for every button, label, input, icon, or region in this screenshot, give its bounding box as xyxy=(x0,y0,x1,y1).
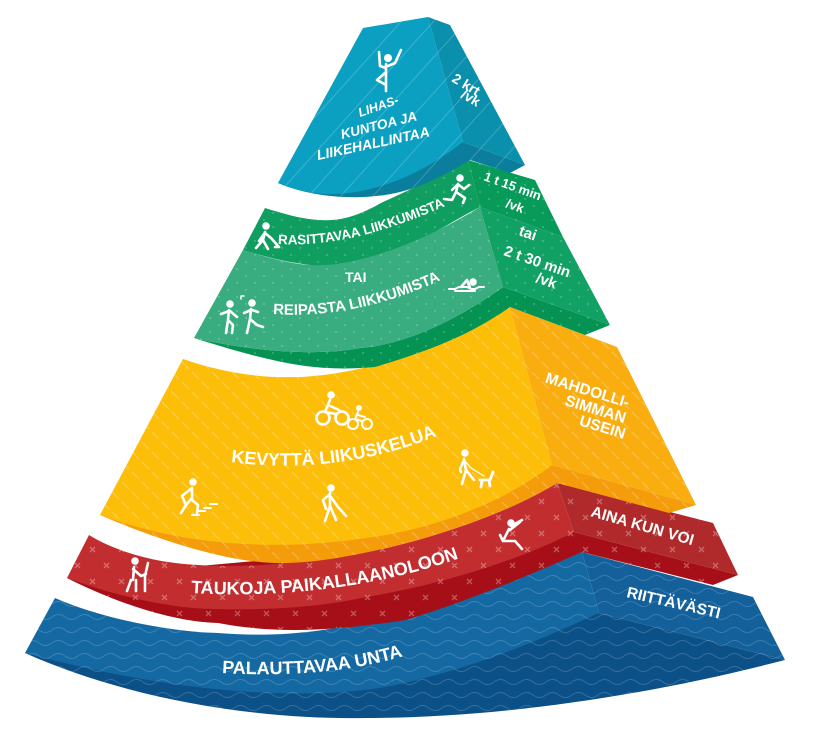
heading: tai: TAI xyxy=(345,269,367,285)
label: tai 2 t 30 min /vk: tai xyxy=(517,223,539,244)
panel: rasittavaa ja reipasta liikkumista tier xyxy=(194,160,610,368)
heading: lihaskuntoa ja liikehallintaa: LIHAS- xyxy=(356,93,400,120)
icon: floorball player xyxy=(256,222,279,249)
label: aina kun voi: AINA KUN VOI xyxy=(589,504,696,549)
icon: climbing person xyxy=(500,519,522,549)
label: mahdollisimman usein: MAHDOLLI- xyxy=(543,370,631,412)
panel: kevyttä liikuskelua tier xyxy=(100,307,696,564)
icon: dog walker xyxy=(460,449,493,487)
icon: walker with stick xyxy=(323,484,346,521)
label: tai 2 t 30 min /vk: 2 t 30 min xyxy=(502,243,573,281)
icon: dancers with music note xyxy=(221,296,263,333)
label: mahdollisimman usein: USEIN xyxy=(577,413,627,443)
label: 1 t 15 min /vk: 1 t 15 min xyxy=(482,169,544,203)
label: riittävästi: RIITTÄVÄSTI xyxy=(625,584,722,622)
heading: kevyttä liikuskelua: KEVYTTÄ LIIKUSKELUA xyxy=(232,426,437,466)
label: 2 krt /vk: /vk xyxy=(458,86,484,110)
heading: lihaskuntoa ja liikehallintaa xyxy=(315,93,431,163)
panel: lihaskuntoa ja liikehallintaa tier xyxy=(278,17,525,197)
label: tai 2 t 30 min /vk: /vk xyxy=(534,270,560,293)
heading: taukoja paikallaanoloon: TAUKOJA PAIKALLAANOLOON xyxy=(192,547,458,594)
label: 1 t 15 min /vk: /vk xyxy=(504,196,527,216)
icon: swimmer xyxy=(449,278,484,291)
label: mahdollisimman usein xyxy=(543,370,631,443)
heading: reipasta liikkumista: REIPASTA LIIKKUMISTA xyxy=(274,272,440,315)
label: tai 2 t 30 min /vk xyxy=(502,223,573,293)
heading: lihaskuntoa ja liikehallintaa: LIIKEHALLINTAA xyxy=(315,123,431,163)
heading: lihaskuntoa ja liikehallintaa: KUNTOA JA xyxy=(339,108,418,142)
label: 2 krt /vk: 2 krt xyxy=(449,70,483,99)
label: mahdollisimman usein: SIMMAN xyxy=(563,392,628,427)
icon: person in balance pose xyxy=(377,50,401,91)
heading: rasittavaa liikkumista: RASITTAVAA LIIKKUMISTA xyxy=(278,199,445,244)
icon: person at standing desk xyxy=(127,557,148,591)
heading: palauttavaa unta: PALAUTTAVAA UNTA xyxy=(223,646,402,674)
panel: palauttavaa unta tier xyxy=(25,552,785,718)
icon: runner xyxy=(444,174,469,203)
icon: walker on stairs xyxy=(181,478,217,515)
panel: taukoja paikallaanoloon tier xyxy=(67,483,738,630)
icon: cyclists xyxy=(316,391,372,429)
